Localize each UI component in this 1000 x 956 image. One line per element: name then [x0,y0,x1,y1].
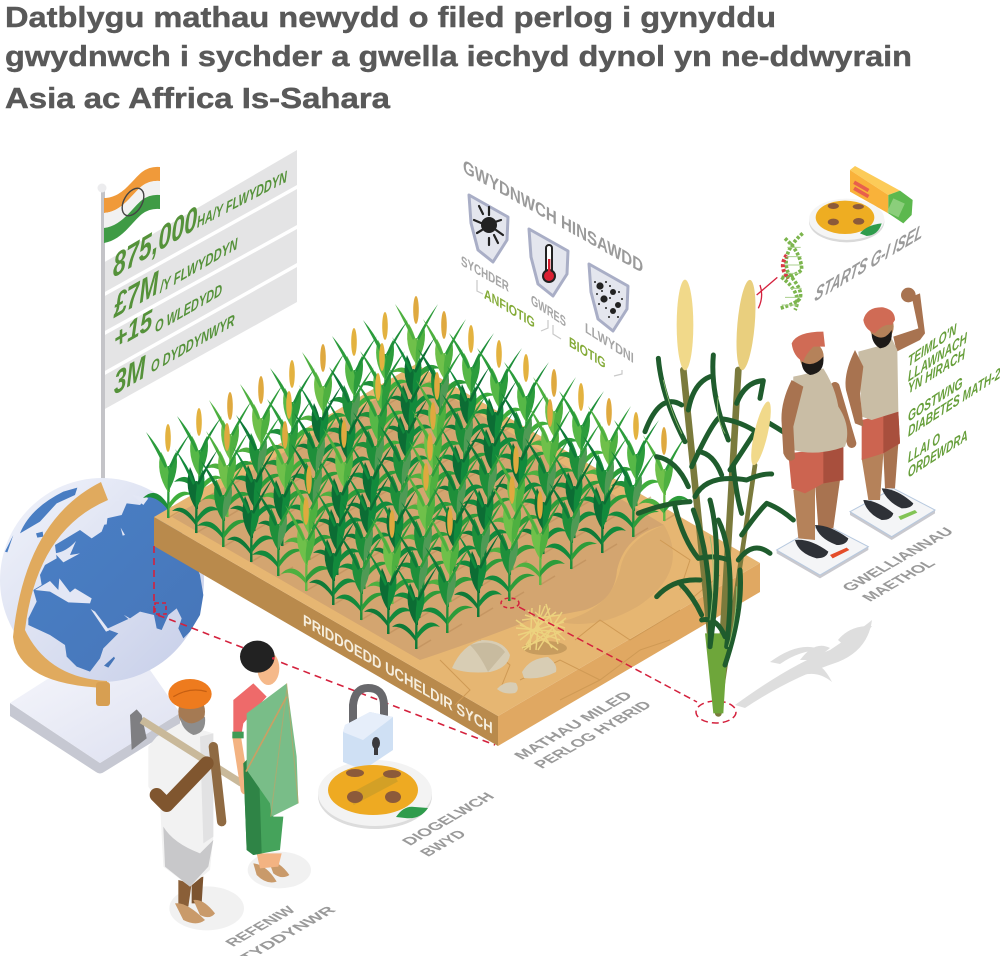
icon: heat shield [529,229,568,296]
panel: statistics flag board: 3M [114,348,146,402]
illustration: tall hybrid pearl millet plant [638,279,800,713]
illustration: man after, on green scale [846,288,935,540]
panel: statistics flag board: +15 [114,303,153,356]
label: hybrid pearl millet varieties: MATHAU MILED [511,690,637,762]
text block: health benefits [908,320,1000,482]
illustration: globe on stand [0,478,204,774]
title: Asia ac Affrica Is-Sahara [5,83,391,115]
panel: statistics flag board: O DYDDYNWYR [151,311,235,377]
label: stress categories: GWRES [531,291,566,330]
label: stress categories: ANFIOTIG [484,285,535,331]
label: stress categories: SYCHDER [461,252,509,295]
illustration: millet crop rows [143,296,689,649]
title: Datblygu mathau newydd o filed perlog i gynyddu [5,2,776,34]
callout: dashed link from plant spot to hybrid plant [501,598,736,723]
panel: statistics flag board [103,150,297,410]
text block: health benefits: YN HIRACH [908,345,966,398]
text block: health benefits: LLAI O [908,429,940,467]
illustration: woman in green saree [232,641,311,888]
label: smallholder revenue: REFENIW [222,904,301,949]
label: food security: BWYD [417,828,471,859]
text block: health benefits: ORDEWDRA [908,427,968,482]
panel: statistics flag board: HA/Y FLWYDDYN [197,168,287,232]
label: stress categories: BIOTIG [569,333,606,372]
icon: drought shield [469,195,508,262]
label: stress categories: LLWYDNI [585,319,634,366]
label: stress categories [461,252,634,372]
heading: climate resilience [461,155,643,376]
illustration: dry tumbleweed [516,604,567,655]
title [5,2,912,115]
illustration: man before, on red scale [777,332,868,578]
illustration: low G-I food box and plate [809,166,913,242]
icon: Indian flag on pole [98,167,160,486]
label: nutritional improvements: GWELLIANNAU [839,526,958,594]
panel: statistics flag board: /Y FLWYDDYN [159,234,238,297]
label: hybrid pearl millet varieties: PERLOG HYBRID [531,699,656,771]
panel: statistics flag board: 875,000 [113,198,198,285]
text block: health benefits: GOSTWNG [908,374,963,426]
label: dry upland soils: PRIDDOEDD UCHELDIR SYCH [303,611,493,738]
label: low G-I starches: STARTS G-I ISEL [813,219,925,307]
title: gwydnwch i sychder a gwella iechyd dynol yn ne-ddwyrain [5,41,912,73]
label: food security: DIOGELWCH [399,791,499,848]
text block: health benefits: LLAWNACH [908,329,968,386]
icon: padlock over food plate [318,688,432,829]
panel: statistics flag board: £7M [113,262,159,325]
text block: health benefits: TEIMLO'N [908,320,957,371]
illustration: smallholder farmer with hoe [130,679,244,930]
illustration: rocks [452,640,556,694]
illustration: plant shadow on ground [735,620,872,708]
heading: climate resilience: GWYDNWCH HINSAWDD [463,155,643,277]
label: smallholder revenue [222,904,340,956]
callout: dashed link from India on globe to field [154,546,495,745]
label: nutritional improvements: MAETHOL [859,557,940,604]
icon: DNA helix with red link [757,233,803,310]
panel: statistics flag board: O WLEDYDD [155,280,222,337]
panel: soil field block [154,364,760,746]
icon: disease shield [589,264,628,331]
